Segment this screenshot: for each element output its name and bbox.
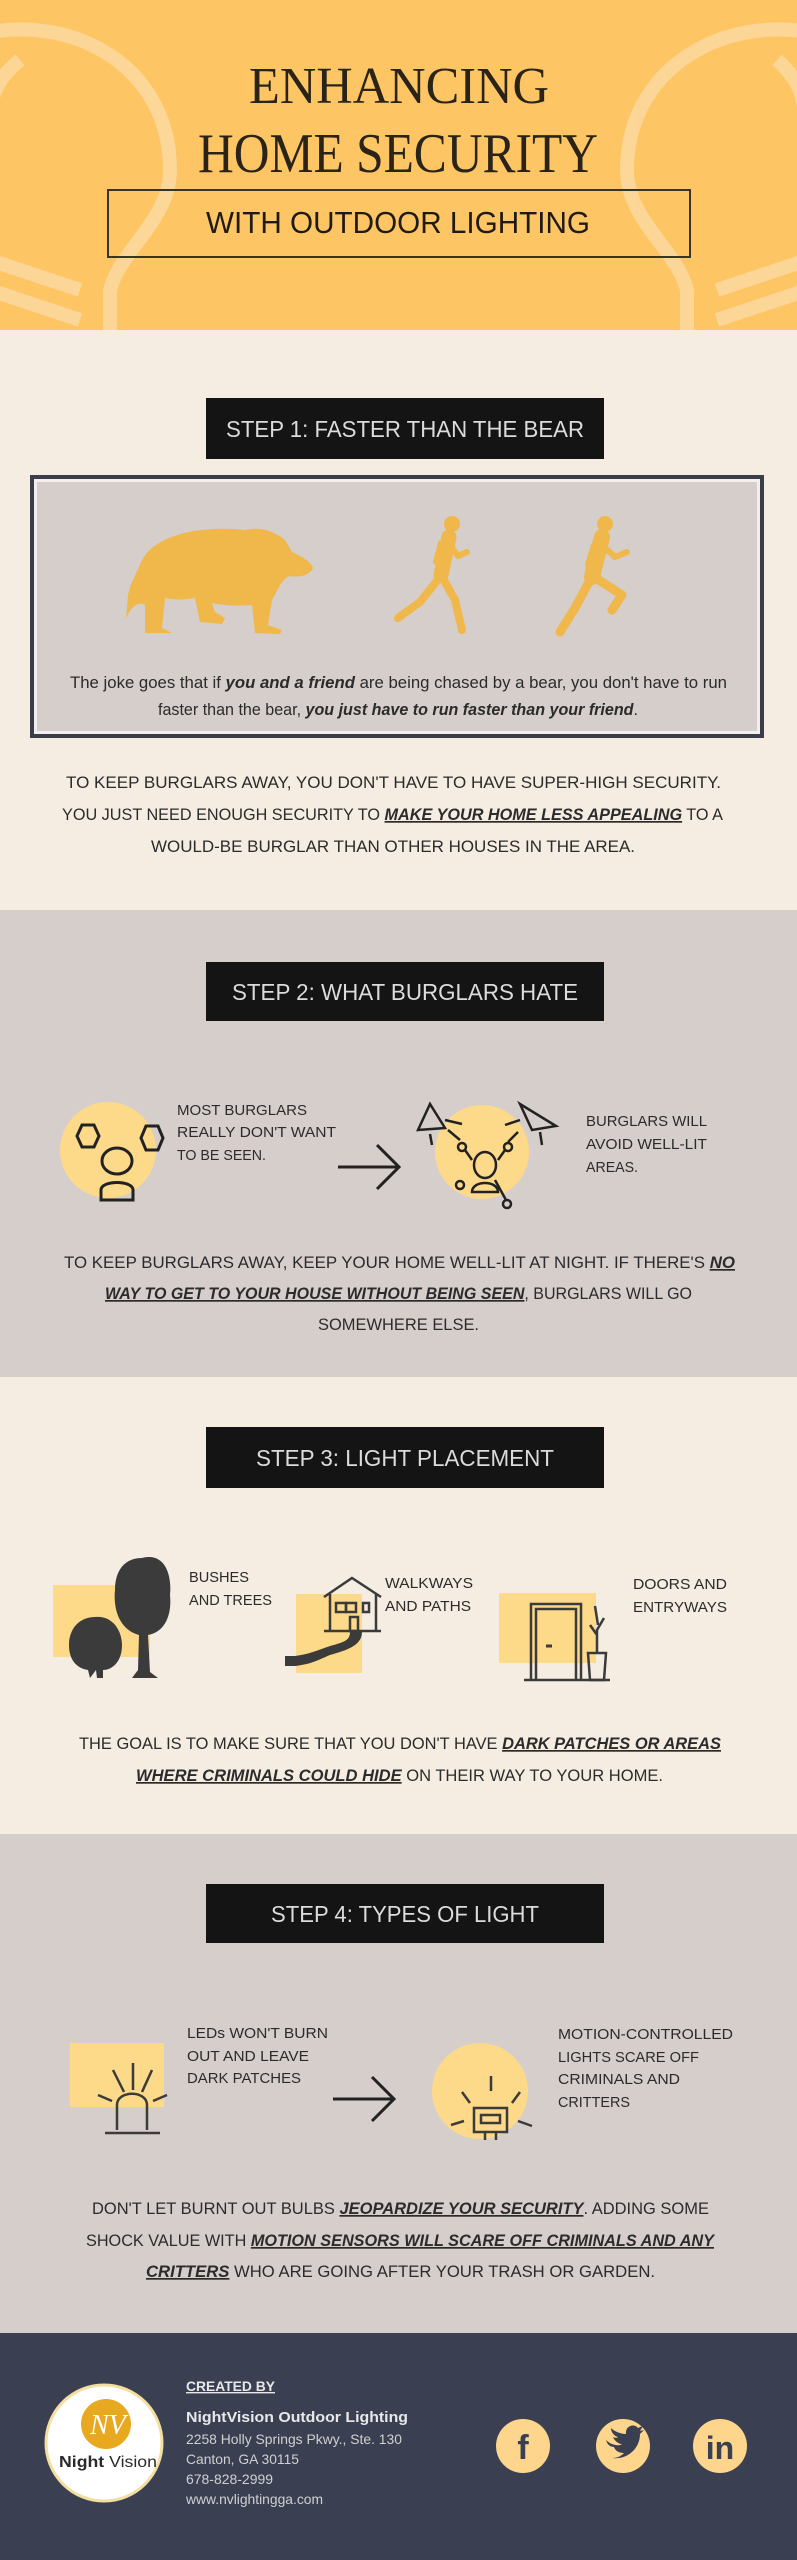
text: burglars avoid: BURGLARS WILL — [586, 1113, 707, 1130]
heading: step 4 — [206, 1884, 604, 1943]
icon: door — [499, 1593, 610, 1680]
panel: step 2 — [0, 910, 797, 1377]
text: step 4 body: DON'T LET BURNT OUT BULBS JEOPARDIZE YOUR SECURITY. ADDING SOME — [92, 2199, 709, 2218]
text: doors: ENTRYWAYS — [633, 1599, 727, 1616]
icon: NightVision logo: NV — [89, 2410, 129, 2441]
icon: lit burglar — [418, 1104, 556, 1208]
text: created by: www.nvlightingga.com — [185, 2491, 323, 2507]
text: LEDs: DARK PATCHES — [187, 2070, 301, 2087]
heading: step 4: STEP 4: TYPES OF LIGHT — [271, 1901, 539, 1927]
text: step 1 body — [62, 773, 724, 856]
text: step 1 body: YOU JUST NEED ENOUGH SECURITY TO MAKE YOUR HOME LESS APPEALING TO A — [62, 805, 724, 824]
text: doors — [633, 1576, 727, 1616]
header panel — [0, 0, 797, 330]
text: step 2 body: WAY TO GET TO YOUR HOUSE WITHOUT BEING SEEN, BURGLARS WILL GO — [105, 1284, 692, 1303]
text: step 3 body: WHERE CRIMINALS COULD HIDE ON THEIR WAY TO YOUR HOME. — [136, 1766, 663, 1785]
text: joke — [70, 673, 727, 719]
text: burglars avoid: AREAS. — [586, 1159, 638, 1176]
text: bushes and trees — [189, 1569, 272, 1609]
icon: linkedin: in — [706, 2430, 734, 2466]
icon: bear — [126, 529, 313, 634]
panel: step 4 — [0, 1834, 797, 2333]
text: step 2 body: TO KEEP BURGLARS AWAY, KEEP YOUR HOME WELL-LIT AT NIGHT. IF THERE'S NO — [64, 1253, 735, 1272]
title — [198, 58, 598, 185]
text: LEDs — [187, 2025, 328, 2087]
text: step 2 body — [64, 1253, 735, 1334]
text: created by: 2258 Holly Springs Pkwy., Ste. 130 — [186, 2431, 402, 2447]
text: joke: The joke goes that if you and a friend are being chased by a bear, you don't have to run — [70, 673, 727, 692]
heading: step 3 — [206, 1427, 604, 1488]
icon: facebook: f — [517, 2429, 529, 2467]
text: step 4 body — [86, 2199, 716, 2281]
icon: linkedin — [693, 2419, 747, 2473]
text: walkways: AND PATHS — [385, 1598, 471, 1615]
text: step 4 body: SHOCK VALUE WITH MOTION SENSORS WILL SCARE OFF CRIMINALS AND ANY — [86, 2231, 716, 2250]
text: LEDs: LEDs WON'T BURN — [187, 2025, 328, 2042]
text: burglars avoid — [586, 1113, 707, 1176]
title: HOME SECURITY — [198, 123, 598, 185]
text: bushes and trees: BUSHES — [189, 1569, 249, 1586]
panel: bear joke — [30, 475, 764, 738]
text: step 2 body: SOMEWHERE ELSE. — [318, 1315, 479, 1334]
footer — [0, 2333, 797, 2560]
icon: motion sensor light — [432, 2043, 532, 2140]
text: step 1 body: WOULD-BE BURGLAR THAN OTHER HOUSES IN THE AREA. — [151, 837, 635, 856]
icon: runner 2 — [560, 516, 627, 632]
text: LEDs: OUT AND LEAVE — [187, 2048, 309, 2065]
text: step 4 body: CRITTERS WHO ARE GOING AFTER YOUR TRASH OR GARDEN. — [146, 2262, 655, 2281]
icon: NightVision logo — [46, 2385, 162, 2501]
text: doors: DOORS AND — [633, 1576, 727, 1593]
icon: walkway house — [285, 1578, 381, 1673]
panel: step 1 — [0, 330, 797, 910]
subtitle box — [108, 190, 690, 257]
text: created by: 678-828-2999 — [186, 2471, 273, 2487]
text: created by: CREATED BY — [186, 2378, 276, 2394]
title: ENHANCING — [249, 58, 549, 115]
arrow — [333, 2077, 394, 2121]
text: joke: faster than the bear, you just have to run faster than your friend. — [158, 700, 638, 719]
icon: decorative right bulb — [627, 30, 797, 330]
text: created by — [185, 2378, 408, 2507]
text: most burglars: TO BE SEEN. — [177, 1147, 266, 1164]
text: most burglars — [177, 1102, 336, 1164]
text: motion controlled: LIGHTS SCARE OFF — [558, 2049, 699, 2066]
text: created by: Canton, GA 30115 — [186, 2451, 299, 2467]
heading: step 2: STEP 2: WHAT BURGLARS HATE — [232, 979, 578, 1005]
panel: step 3 — [0, 1377, 797, 1834]
text: step 1 body: TO KEEP BURGLARS AWAY, YOU DON'T HAVE TO HAVE SUPER-HIGH SECURITY. — [66, 773, 721, 792]
icon: runner 1 — [398, 516, 467, 630]
text: step 3 body — [79, 1734, 722, 1785]
icon: facebook — [496, 2419, 550, 2473]
text: walkways — [385, 1575, 473, 1615]
icon: decorative left bulb — [0, 30, 170, 330]
icon: hiding burglars — [60, 1102, 163, 1200]
heading: step 2 — [206, 962, 604, 1021]
text: most burglars: MOST BURGLARS — [177, 1102, 307, 1119]
heading: step 3: STEP 3: LIGHT PLACEMENT — [256, 1445, 554, 1471]
icon: NightVision logo: Night Vision — [59, 2454, 157, 2471]
heading: step 1 — [206, 398, 604, 459]
text: walkways: WALKWAYS — [385, 1575, 473, 1592]
text: most burglars: REALLY DON'T WANT — [177, 1124, 336, 1141]
icon: bushes and trees — [53, 1557, 170, 1678]
icon: twitter — [596, 2419, 650, 2473]
icon: LED alarm light — [70, 2043, 167, 2133]
text: step 3 body: THE GOAL IS TO MAKE SURE THAT YOU DON'T HAVE DARK PATCHES OR AREAS — [79, 1734, 722, 1753]
text: burglars avoid: AVOID WELL-LIT — [586, 1136, 707, 1153]
text: bushes and trees: AND TREES — [189, 1592, 272, 1609]
text: motion controlled: CRIMINALS AND — [558, 2071, 680, 2088]
text: motion controlled — [558, 2026, 733, 2111]
text: motion controlled: CRITTERS — [558, 2094, 630, 2111]
subtitle box: WITH OUTDOOR LIGHTING — [206, 205, 590, 240]
arrow — [338, 1145, 399, 1189]
text: created by: NightVision Outdoor Lighting — [186, 2409, 408, 2426]
heading: step 1: STEP 1: FASTER THAN THE BEAR — [226, 416, 584, 442]
text: motion controlled: MOTION-CONTROLLED — [558, 2026, 733, 2043]
